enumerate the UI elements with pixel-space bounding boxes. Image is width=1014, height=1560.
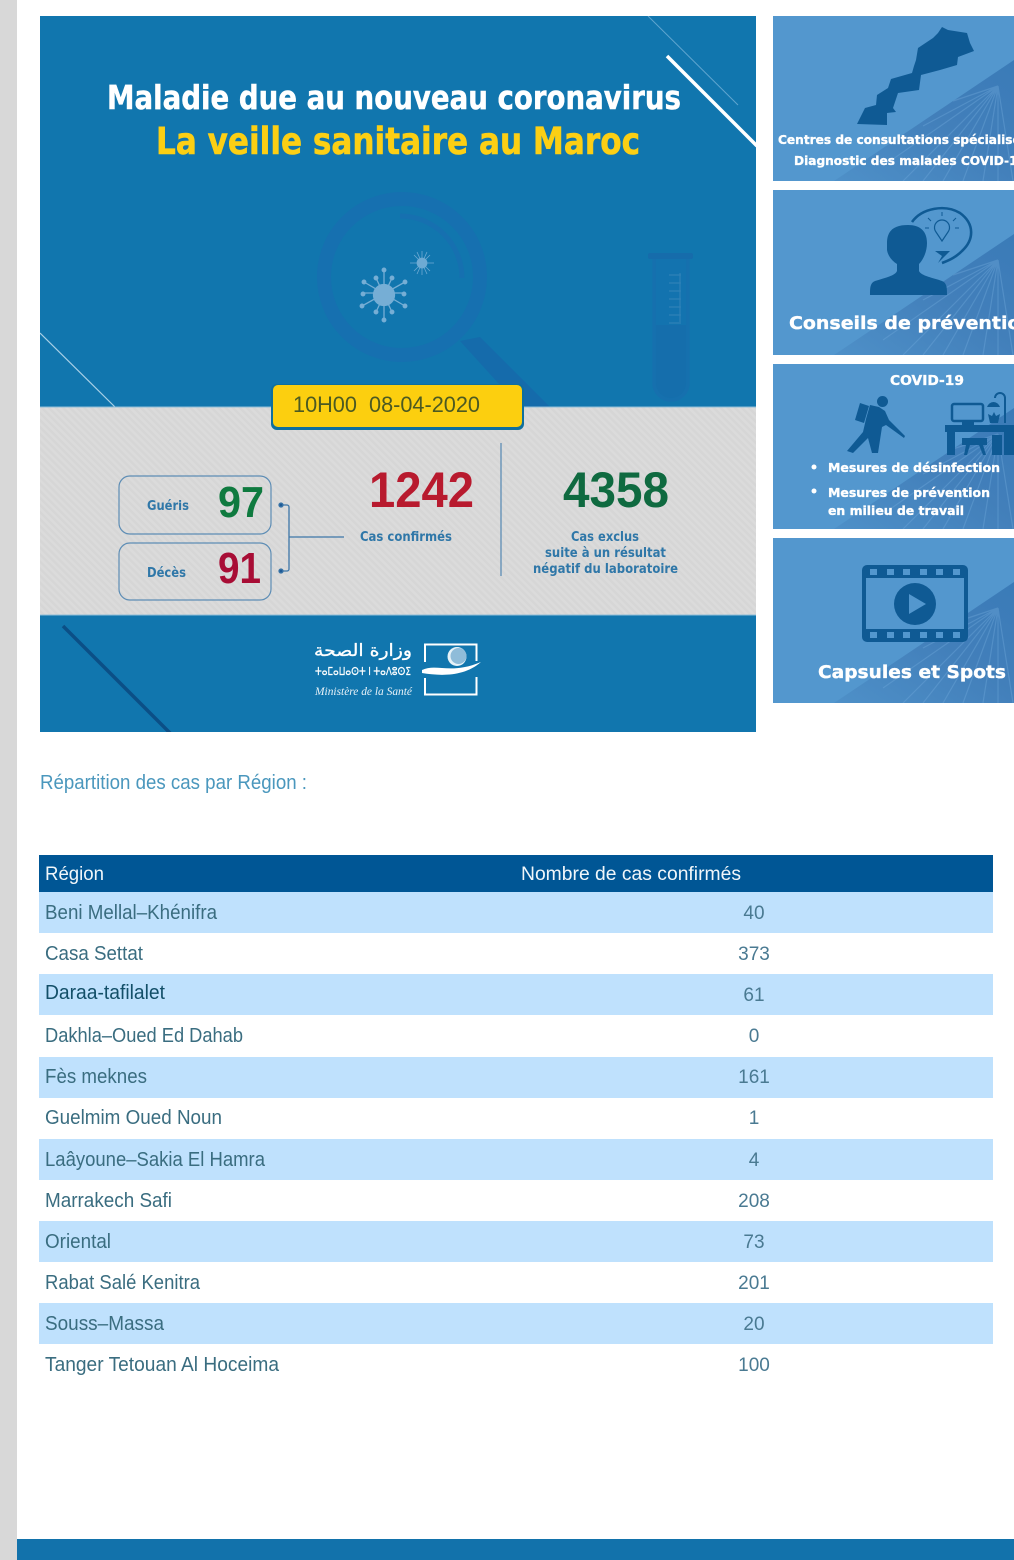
table rows: 373 xyxy=(738,944,770,965)
stat: excluded cases: négatif du laboratoire xyxy=(533,561,678,577)
stat: excluded cases xyxy=(533,462,678,577)
icon: magnifying glass with viruses xyxy=(360,251,549,406)
divider xyxy=(500,443,502,576)
table rows: 0 xyxy=(749,1026,759,1047)
ministry logo xyxy=(314,641,481,698)
table rows: 1 xyxy=(749,1108,759,1129)
card: Décès xyxy=(119,543,271,600)
title: Maladie due au nouveau coronavirus xyxy=(107,78,681,117)
icon: small virus xyxy=(410,251,434,275)
table header: Nombre de cas confirmés xyxy=(521,864,741,885)
table rows: 161 xyxy=(738,1067,770,1088)
ministry logo: Ministère de la Santé xyxy=(314,684,413,698)
decorative dark diagonal bottom left xyxy=(63,626,171,734)
table rows: 40 xyxy=(743,903,765,924)
table rows: 73 xyxy=(743,1232,765,1253)
table rows: Guelmim Oued Noun xyxy=(45,1107,222,1129)
table rows: Fès meknes xyxy=(45,1066,147,1088)
label: COVID-19: COVID-19 xyxy=(890,373,964,389)
table rows: Souss–Massa xyxy=(45,1313,165,1335)
table rows: Dakhla–Oued Ed Dahab xyxy=(45,1025,243,1047)
table rows: Beni Mellal–Khénifra xyxy=(45,902,218,924)
table rows xyxy=(45,902,770,1376)
label: Capsules et Spots xyxy=(818,662,1006,683)
icon: person with light bulb xyxy=(870,208,971,295)
table rows: Daraa-tafilalet xyxy=(45,982,165,1004)
table header: Région xyxy=(45,864,104,885)
stat: confirmed cases: 1242 xyxy=(369,462,474,518)
table: cases by region xyxy=(39,855,993,1376)
card: Décès: 91 xyxy=(218,544,261,593)
table rows: Rabat Salé Kenitra xyxy=(45,1272,201,1294)
bracket connector xyxy=(279,503,344,573)
table header xyxy=(39,855,993,892)
footer bar xyxy=(17,1539,1014,1560)
table rows: Laâyoune–Sakia El Hamra xyxy=(45,1149,266,1171)
date badge xyxy=(271,384,524,430)
title xyxy=(109,84,680,155)
icon: large virus xyxy=(360,268,407,322)
table rows: 100 xyxy=(738,1355,770,1376)
panel: centres de consultations xyxy=(773,16,1014,181)
icon: video film strip xyxy=(862,565,968,642)
stat: confirmed cases xyxy=(360,462,474,545)
icon: test tube xyxy=(648,253,693,400)
list: mesures: Mesures de désinfection xyxy=(828,460,1000,475)
label xyxy=(778,132,1014,168)
table rows: Casa Settat xyxy=(45,943,143,965)
table rows: 20 xyxy=(743,1314,765,1335)
date badge: 10H00 08-04-2020 xyxy=(293,392,480,417)
ministry logo: ⵜⴰⵎⴰⵡⴰⵙⵜ ⵏ ⵜⴰⴷⵓⵙⵉ xyxy=(315,666,411,678)
stat: confirmed cases: Cas confirmés xyxy=(360,529,452,545)
card: Guéris: Guéris xyxy=(147,499,189,514)
table rows: Oriental xyxy=(45,1231,111,1253)
icon: map of Morocco xyxy=(857,27,974,125)
panel: capsules et spots xyxy=(773,538,1014,703)
table rows: 61 xyxy=(743,985,765,1006)
table rows: 4 xyxy=(749,1150,760,1171)
heading: répartition: Répartition des cas par Région : xyxy=(40,772,307,794)
table rows: Marrakech Safi xyxy=(45,1190,172,1212)
panel: conseils de prévention xyxy=(773,190,1014,355)
list: mesures: Mesures de prévention xyxy=(828,485,990,500)
icon: office desk xyxy=(945,393,1014,455)
panel: hatched gray band xyxy=(40,407,756,615)
table rows: 201 xyxy=(738,1273,770,1294)
decorative diagonal lines top right xyxy=(40,16,757,407)
icon: disinfection worker xyxy=(847,396,905,453)
stat: excluded cases: 4358 xyxy=(563,462,669,518)
table rows: Tanger Tetouan Al Hoceima xyxy=(45,1354,280,1376)
list: mesures xyxy=(812,460,1000,518)
stat: excluded cases: suite à un résultat xyxy=(545,545,666,561)
card: Décès: Décès xyxy=(147,566,186,581)
panel: COVID-19 mesures xyxy=(773,364,1014,529)
title: La veille sanitaire au Maroc xyxy=(156,120,640,163)
panel: main infographic xyxy=(40,16,757,734)
ministry logo: وزارة الصحة xyxy=(314,641,412,661)
card: Guéris xyxy=(119,476,271,534)
card: Guéris: 97 xyxy=(218,478,264,527)
list: mesures: en milieu de travail xyxy=(828,503,964,518)
stat: excluded cases: Cas exclus xyxy=(571,529,639,545)
table rows: 208 xyxy=(738,1191,770,1212)
